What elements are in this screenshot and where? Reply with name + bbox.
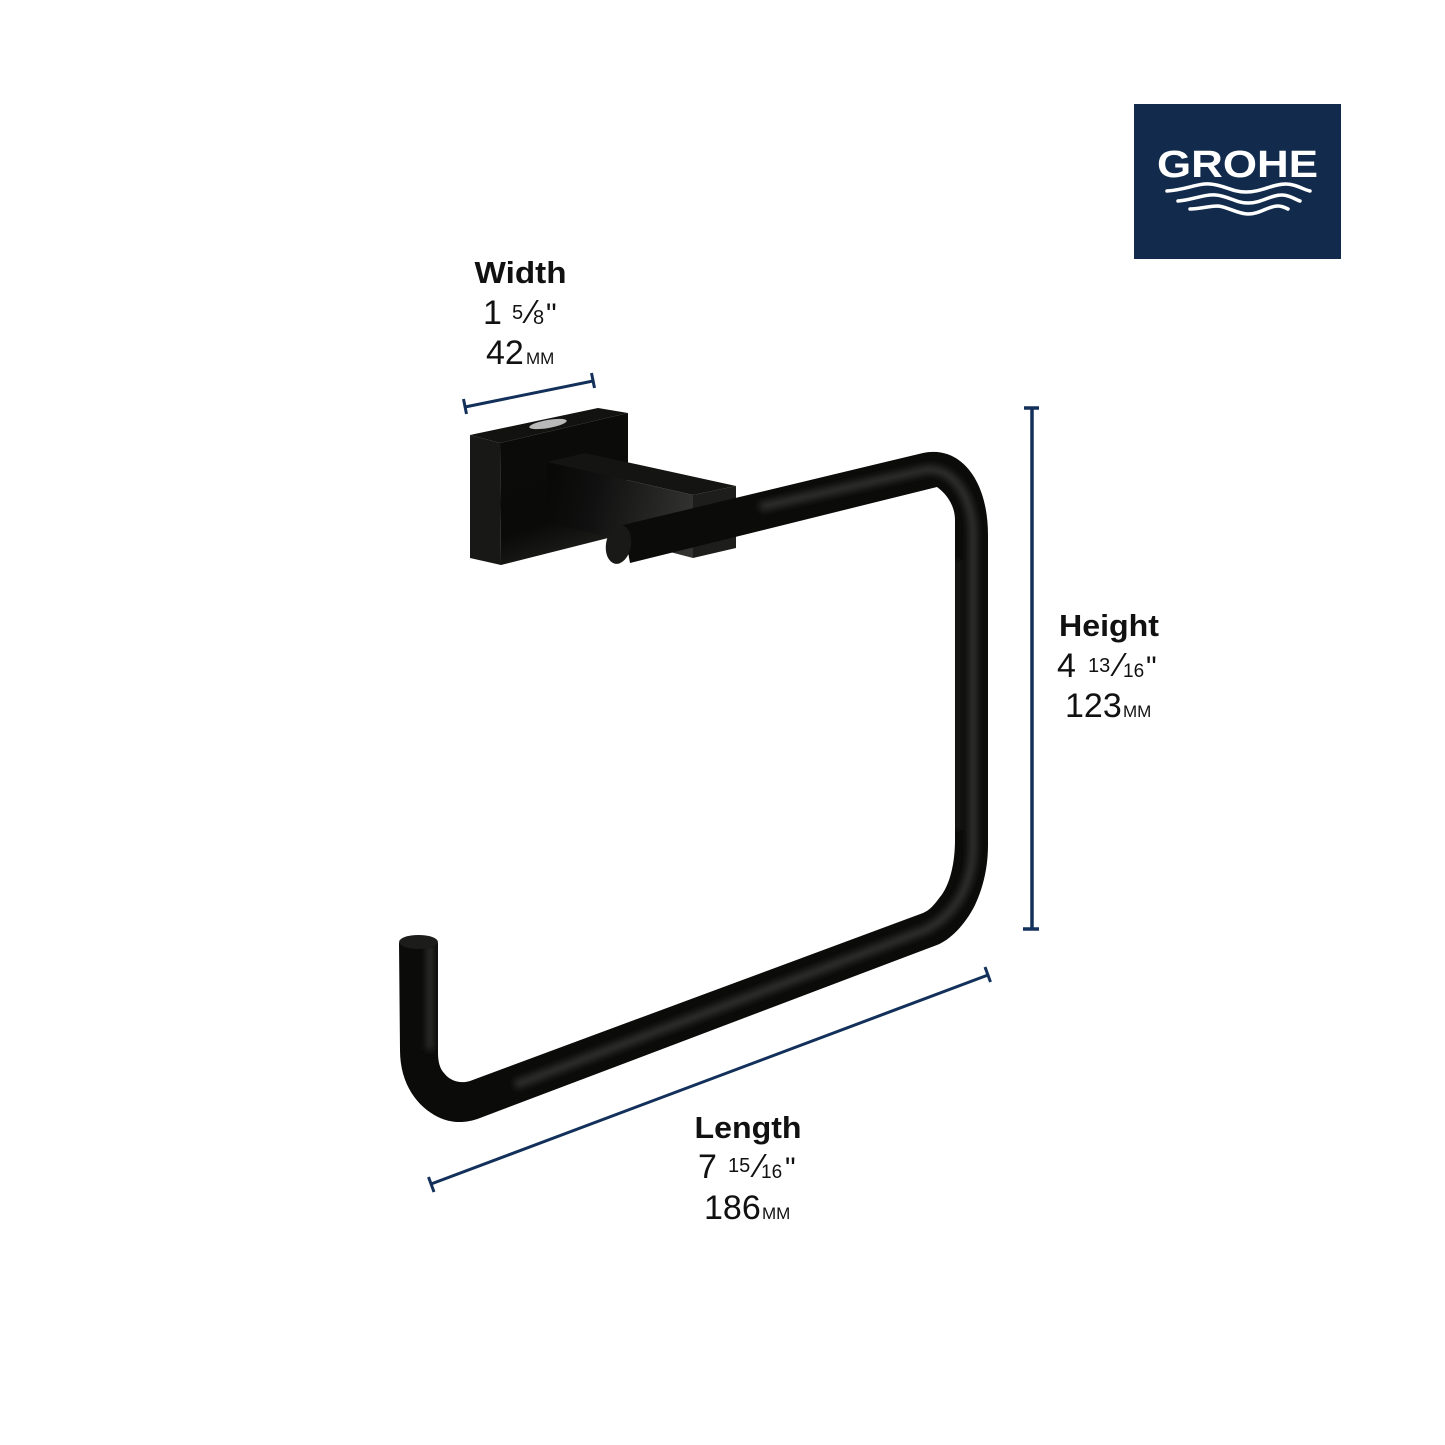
length dimension line: [428, 967, 990, 1192]
height heading and values: [1057, 608, 1159, 725]
infographic canvas: [399, 104, 1341, 1220]
height heading and values: 16: [1123, 661, 1144, 682]
width heading and values: 5: [512, 302, 523, 324]
logo: GROHE: GROHE: [1157, 144, 1318, 186]
length heading and values: ⁄: [750, 1147, 767, 1184]
height heading and values: ": [1146, 651, 1157, 684]
length heading and values: [694, 1110, 802, 1227]
height heading and values: MM: [1123, 702, 1151, 721]
width heading and values: 8: [533, 307, 544, 329]
tube body: [399, 452, 988, 1122]
towel ring tube: [399, 452, 988, 1122]
length heading and values: 186: [704, 1189, 761, 1227]
length heading and values: MM: [762, 1204, 790, 1223]
width heading and values: MM: [526, 349, 554, 368]
width heading and values: Width: [474, 255, 566, 290]
width heading and values: [474, 255, 566, 372]
wall bracket: [470, 408, 736, 565]
length heading and values: 15: [728, 1155, 750, 1177]
height heading and values: 123: [1065, 687, 1122, 725]
height heading and values: 13: [1088, 655, 1110, 677]
left end cap: [399, 935, 438, 949]
width heading and values: 42: [486, 334, 524, 372]
tube highlights: [430, 470, 973, 1085]
width dimension line: [464, 373, 594, 414]
logo: GROHE: [1134, 104, 1341, 259]
height heading and values: ⁄: [1110, 646, 1127, 683]
length heading and values: 7: [698, 1148, 717, 1186]
front end cap: [603, 523, 634, 566]
height dimension line: [1023, 408, 1039, 929]
length heading and values: Length: [694, 1110, 802, 1145]
width heading and values: ": [546, 298, 557, 331]
height heading and values: 4: [1057, 647, 1076, 685]
length heading and values: ": [785, 1152, 796, 1185]
width heading and values: 1: [483, 294, 502, 332]
width heading and values: ⁄: [522, 293, 539, 330]
height heading and values: Height: [1059, 608, 1159, 643]
bracket arm: [547, 453, 736, 558]
bracket plate: [470, 408, 628, 565]
length heading and values: 16: [761, 1162, 782, 1183]
